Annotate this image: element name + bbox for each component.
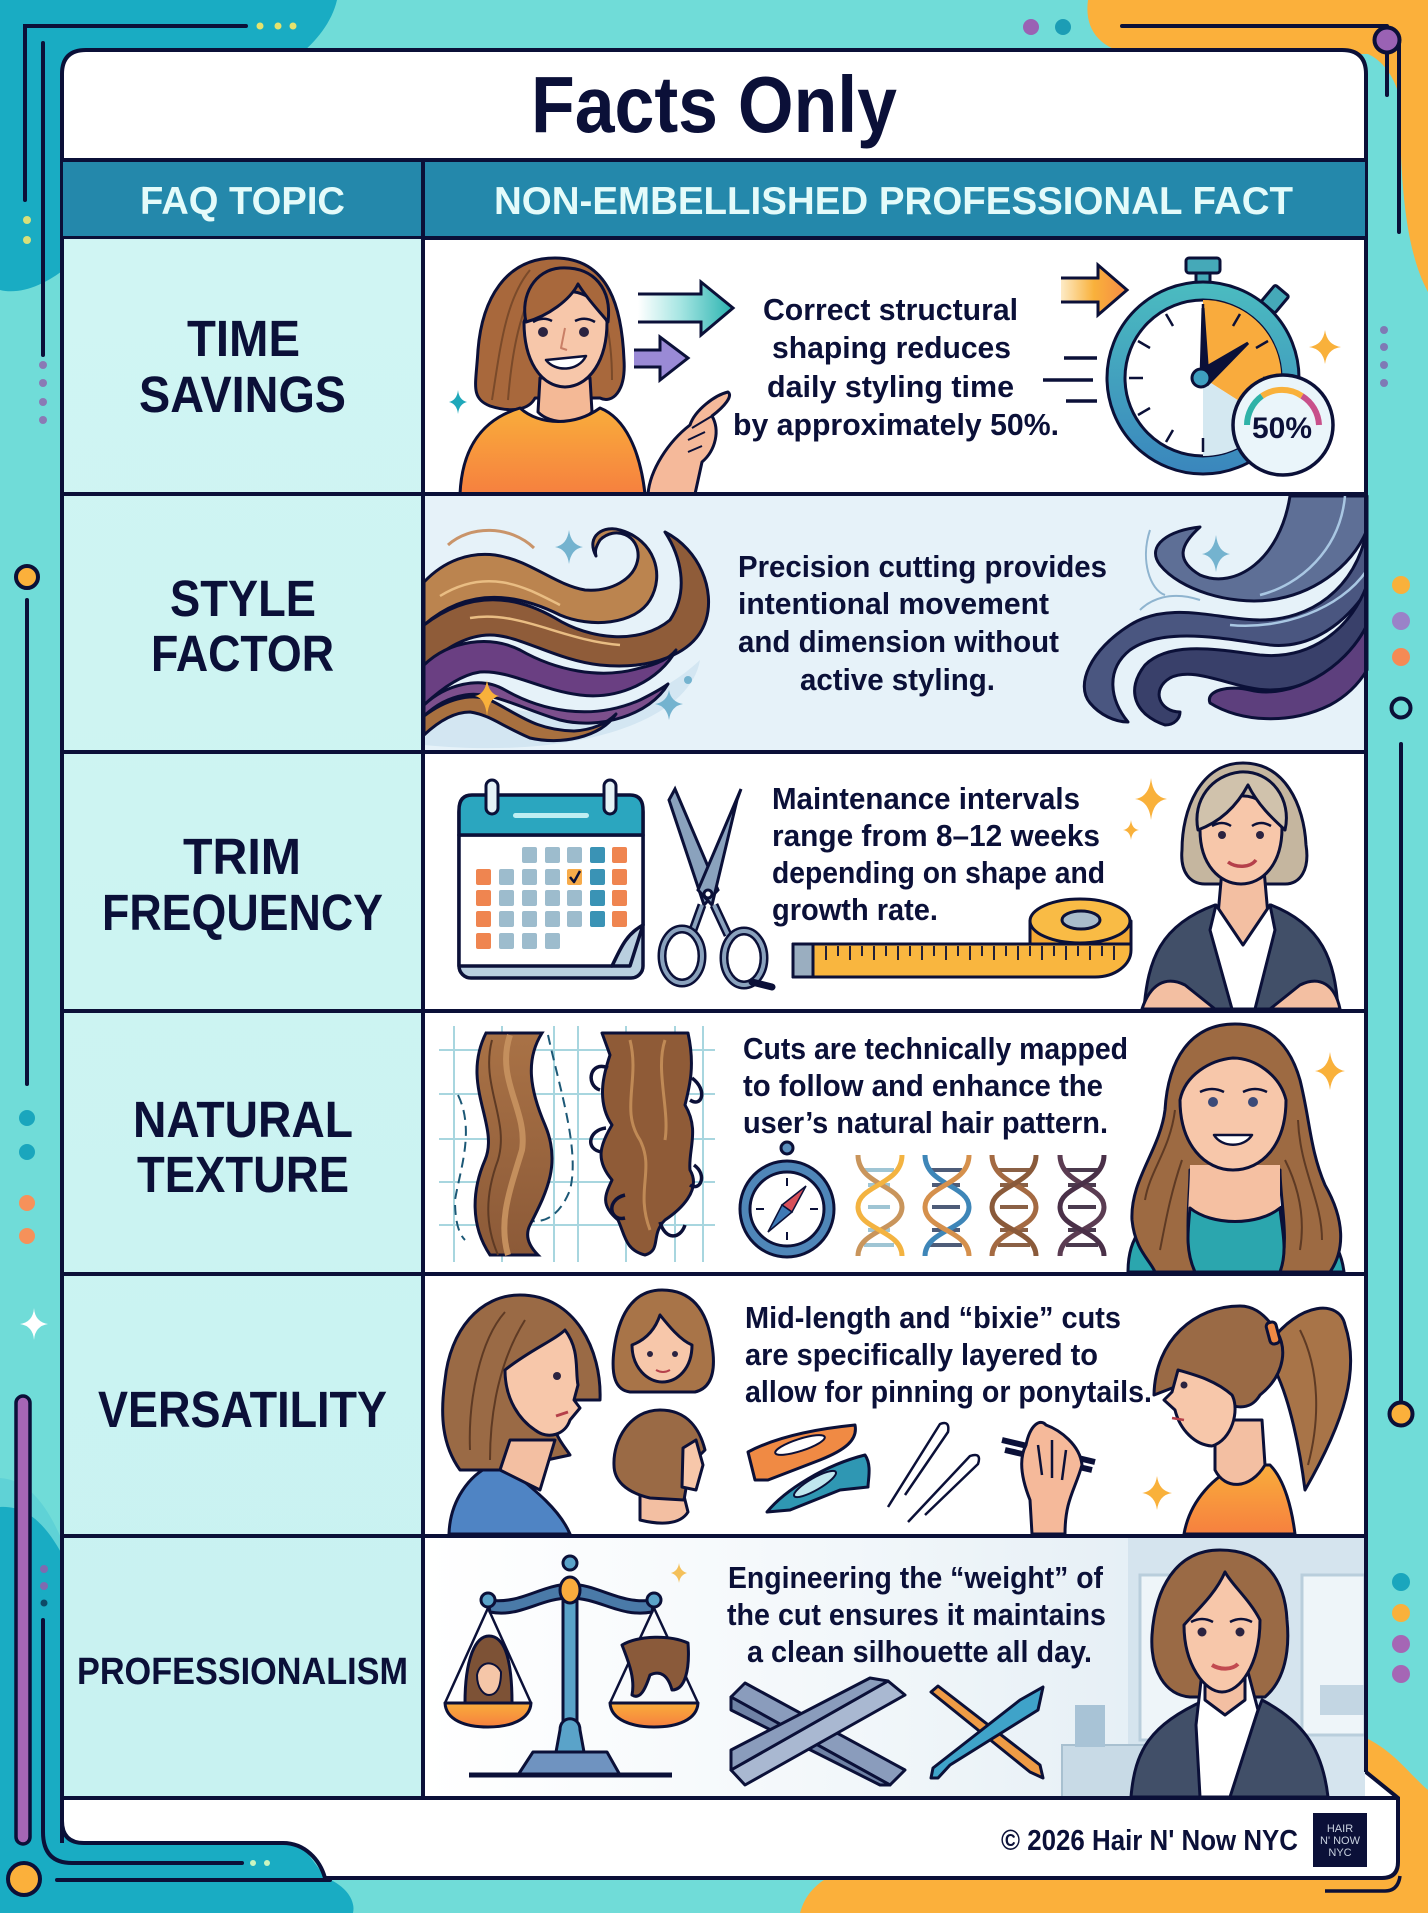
footer shadow stroke bbox=[1325, 1876, 1400, 1891]
logo bbox=[1313, 1813, 1367, 1867]
dashed contours bbox=[455, 1035, 573, 1240]
label: professionalism: PROFESSIONALISM bbox=[77, 1651, 408, 1693]
title: Facts Only bbox=[531, 60, 897, 149]
badge: 50 percent: 50% bbox=[1252, 412, 1312, 445]
measuring tape bbox=[793, 899, 1131, 977]
office backdrop bbox=[1062, 1537, 1365, 1797]
fact: trim frequency: depending on shape and bbox=[772, 855, 1105, 890]
logo: NYC bbox=[1328, 1847, 1352, 1859]
label: trim frequency: FREQUENCY bbox=[102, 884, 383, 941]
blob: bottom left teal bbox=[0, 1507, 353, 1913]
row backgrounds bbox=[425, 495, 1365, 1798]
fact: natural texture: Cuts are technically mapped bbox=[743, 1031, 1128, 1066]
blob: bottom left light bbox=[0, 1478, 70, 1800]
stopwatch bbox=[1107, 258, 1299, 474]
copyright footer: © 2026 Hair N' Now NYC bbox=[1001, 1825, 1298, 1857]
right pan with hair bbox=[622, 1637, 688, 1696]
fact: trim frequency: Maintenance intervals bbox=[772, 781, 1080, 816]
label: versatility: VERSATILITY bbox=[98, 1381, 387, 1438]
scissors bbox=[662, 789, 772, 987]
calendar bbox=[459, 780, 643, 978]
fact: style factor: Precision cutting provides bbox=[738, 549, 1107, 584]
fact: professionalism: the cut ensures it maintains bbox=[727, 1597, 1106, 1632]
label: natural texture: NATURAL bbox=[133, 1091, 353, 1148]
fact: trim frequency: range from 8–12 weeks bbox=[772, 818, 1100, 853]
sparkle bbox=[1315, 1052, 1345, 1090]
label: natural texture bbox=[133, 1091, 353, 1203]
blonde businesswoman bbox=[1142, 763, 1340, 1009]
small bob head bbox=[614, 1410, 705, 1523]
fact texts bbox=[727, 292, 1152, 1669]
fact: natural texture bbox=[743, 1031, 1128, 1140]
panel right and left edges bbox=[62, 238, 1366, 1843]
blob: top left teal bbox=[0, 0, 337, 291]
fact: professionalism: a clean silhouette all day. bbox=[747, 1634, 1092, 1669]
arrow: purple bbox=[634, 337, 688, 380]
fact: style factor: active styling. bbox=[800, 662, 995, 697]
fact: versatility: are specifically layered to bbox=[745, 1337, 1098, 1372]
sparkles bbox=[475, 530, 1230, 720]
fact: natural texture: to follow and enhance the bbox=[743, 1068, 1103, 1103]
curly hair bbox=[591, 1033, 702, 1255]
header: fact: NON-EMBELLISHED PROFESSIONAL FACT bbox=[494, 180, 1293, 223]
badge: 50 percent bbox=[1233, 375, 1333, 475]
label: time savings: SAVINGS bbox=[139, 366, 346, 423]
balance scale bbox=[445, 1556, 698, 1775]
fact: trim frequency bbox=[772, 781, 1105, 927]
arrow: teal bbox=[638, 282, 733, 335]
frame decorations left bbox=[8, 22, 330, 1895]
arrow: orange bbox=[1061, 265, 1127, 315]
hand with pins bbox=[1002, 1422, 1095, 1534]
fact: time savings bbox=[733, 292, 1059, 442]
grid bbox=[439, 1026, 715, 1262]
fact: time savings: shaping reduces bbox=[772, 330, 1011, 365]
fact: natural texture: user’s natural hair pattern. bbox=[743, 1105, 1108, 1140]
sparkle bbox=[671, 1563, 687, 1583]
side profile woman bbox=[443, 1295, 600, 1534]
brown and purple hair wave bbox=[424, 529, 709, 748]
label: style factor bbox=[151, 570, 334, 682]
row labels bbox=[77, 310, 408, 1693]
fact: professionalism: Engineering the “weight” of bbox=[728, 1560, 1104, 1595]
bobby pins bbox=[888, 1423, 979, 1522]
fact: style factor bbox=[738, 549, 1107, 697]
frame decorations right bbox=[1023, 19, 1412, 1683]
logo: N' NOW bbox=[1320, 1835, 1361, 1847]
row 6: professionalism illustration bbox=[445, 1537, 1365, 1797]
fact: style factor: intentional movement bbox=[738, 586, 1049, 621]
fact: style factor: and dimension without bbox=[738, 624, 1059, 659]
fact: trim frequency: growth rate. bbox=[772, 892, 938, 927]
row 5: versatility illustration bbox=[443, 1290, 1351, 1534]
row 1: time savings illustration bbox=[449, 258, 1341, 494]
row 3: trim frequency illustration bbox=[459, 763, 1340, 1009]
businesswoman with bob bbox=[1131, 1550, 1328, 1797]
label: natural texture: TEXTURE bbox=[137, 1146, 349, 1203]
table grid lines bbox=[62, 238, 1398, 1798]
label: style factor: STYLE bbox=[170, 570, 316, 627]
dna strands bbox=[858, 1155, 1104, 1256]
sparkle bbox=[1142, 1476, 1172, 1510]
fact: versatility: Mid-length and “bixie” cuts bbox=[745, 1300, 1121, 1335]
blob: top right orange bbox=[1087, 0, 1428, 292]
fact: time savings: daily styling time bbox=[767, 369, 1014, 404]
row 4: natural texture illustration bbox=[439, 1024, 1345, 1272]
label: time savings bbox=[139, 310, 346, 423]
fact: time savings: by approximately 50%. bbox=[733, 407, 1059, 442]
hair clips bbox=[748, 1425, 869, 1512]
woman pointing bbox=[460, 258, 730, 494]
left pan with head bbox=[465, 1636, 512, 1703]
row 2: style factor illustration bbox=[424, 496, 1367, 748]
fact: professionalism bbox=[727, 1560, 1106, 1669]
small front head bbox=[613, 1290, 713, 1392]
sparkles bbox=[1309, 330, 1341, 364]
ponytail woman bbox=[1154, 1306, 1351, 1534]
crossed i-beams bbox=[731, 1678, 905, 1785]
logo: HAIR bbox=[1327, 1823, 1353, 1835]
label: style factor: FACTOR bbox=[151, 625, 334, 682]
fact: versatility bbox=[745, 1300, 1152, 1409]
table header bbox=[62, 160, 1366, 238]
long-haired woman bbox=[1128, 1024, 1344, 1272]
sparkles bbox=[1135, 778, 1167, 820]
calendar cells bbox=[476, 847, 627, 949]
pencil and pen bbox=[931, 1686, 1043, 1778]
fact: versatility: allow for pinning or ponytails. bbox=[745, 1374, 1152, 1409]
fact: time savings: Correct structural bbox=[763, 292, 1018, 327]
compass bbox=[740, 1142, 834, 1257]
label: time savings: TIME bbox=[187, 310, 300, 367]
label: trim frequency: TRIM bbox=[183, 828, 301, 885]
header: FAQ topic: FAQ TOPIC bbox=[140, 180, 345, 223]
left column background bbox=[64, 239, 422, 1797]
slate hair wave bbox=[1084, 496, 1367, 725]
label: trim frequency bbox=[102, 828, 383, 941]
smooth hair ribbon bbox=[475, 1033, 552, 1255]
blob: bottom right orange bbox=[800, 1738, 1428, 1913]
speed lines bbox=[1043, 358, 1097, 401]
